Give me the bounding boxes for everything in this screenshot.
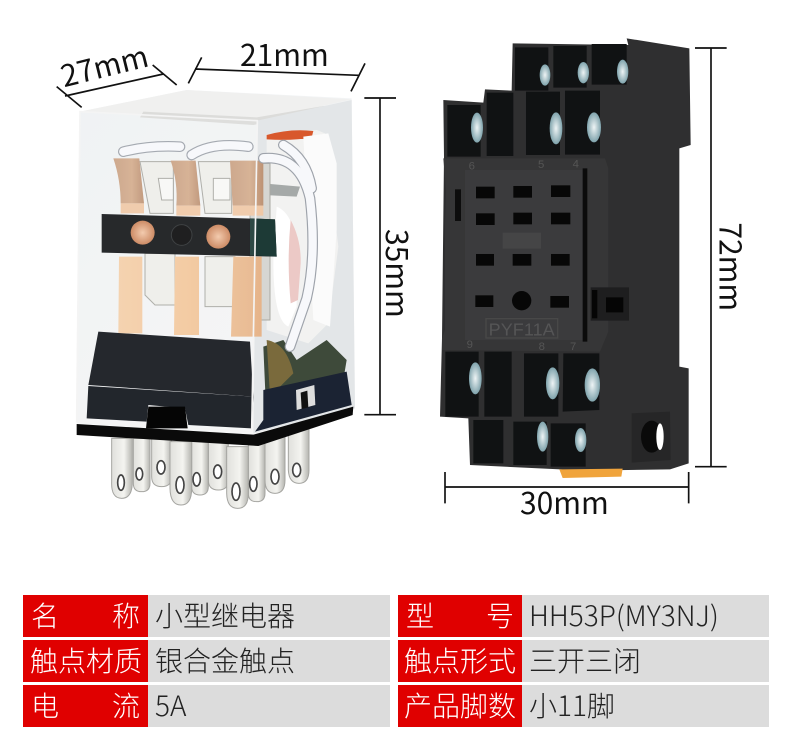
terminal numbers: 4 (573, 158, 579, 170)
coil and armature (255, 130, 352, 432)
row: 触点形式 (398, 640, 769, 682)
row: 触点材质 (23, 640, 390, 682)
dimension: 30mm (445, 472, 689, 523)
row: 触点材质: 银合金触点 (155, 640, 295, 680)
dimension: 35mm: 35mm (377, 229, 421, 318)
lower terminals (445, 352, 599, 467)
row: 电流 (23, 685, 390, 727)
copper terminals (113, 158, 263, 337)
cover top (80, 90, 352, 121)
relay pins (112, 427, 309, 508)
dimension: 27mm: 27mm (56, 32, 152, 96)
row: 触点形式: 三开三闭 (529, 640, 641, 680)
row: 型号: 号 (486, 595, 514, 635)
row: 产品脚数: 小11脚 (529, 685, 615, 725)
black base (88, 332, 253, 397)
clear cover front edge (77, 112, 257, 432)
row: 名称: 小型继电器 (155, 595, 295, 635)
row: 产品脚数: 产品脚数 (404, 685, 516, 725)
white wires (123, 145, 313, 347)
socket (440, 38, 691, 478)
clip (591, 287, 629, 321)
terminal numbers (467, 158, 579, 353)
pin holes (475, 185, 570, 310)
terminal numbers: 6 (469, 160, 475, 172)
row: 电流: 电 (31, 685, 59, 725)
terminal numbers: 5 (538, 159, 544, 171)
base slot (296, 385, 315, 410)
dimension: 35mm (364, 98, 421, 415)
row: 型号: HH53P(MY3NJ) (529, 595, 719, 635)
rail body (440, 38, 691, 471)
product illustration (56, 31, 754, 523)
row: 名称: 名 (31, 595, 59, 635)
upper terminals (447, 44, 627, 157)
steel contacts (140, 162, 270, 320)
terminal numbers: 9 (467, 339, 473, 351)
row: 电流: 流 (112, 685, 140, 725)
row: 名称: 称 (112, 595, 140, 635)
dimension: 21mm: 21mm (240, 31, 329, 75)
terminal screws (469, 60, 628, 452)
row: 名称 (23, 595, 390, 637)
row: 型号: 型 (406, 595, 434, 635)
row: 触点形式: 触点形式 (404, 640, 516, 680)
rivets (131, 221, 155, 245)
row: 电流: 5A (155, 685, 186, 725)
crossbar (102, 214, 277, 257)
row: 型号 (398, 595, 769, 637)
side slot (583, 168, 587, 342)
spec table (23, 595, 769, 727)
model mark: PYF11A (489, 320, 555, 340)
row: 触点材质: 触点材质 (30, 640, 142, 680)
terminal numbers: 7 (570, 341, 576, 353)
dimension: 21mm (188, 31, 365, 91)
dimension: 72mm (695, 48, 754, 467)
cover side (253, 100, 355, 433)
label recess (503, 233, 541, 249)
relay (77, 90, 355, 508)
relay pin holes (118, 461, 301, 500)
clear cover (77, 90, 355, 435)
base rim (77, 407, 353, 446)
dimension: 72mm: 72mm (710, 222, 754, 311)
dimension: 30mm: 30mm (520, 479, 609, 523)
orange latch (559, 469, 623, 478)
socket face (442, 158, 608, 352)
row: 产品脚数 (398, 685, 769, 727)
dimension: 27mm (56, 32, 177, 107)
terminal numbers: 8 (539, 341, 545, 353)
mounting hole (632, 412, 671, 463)
